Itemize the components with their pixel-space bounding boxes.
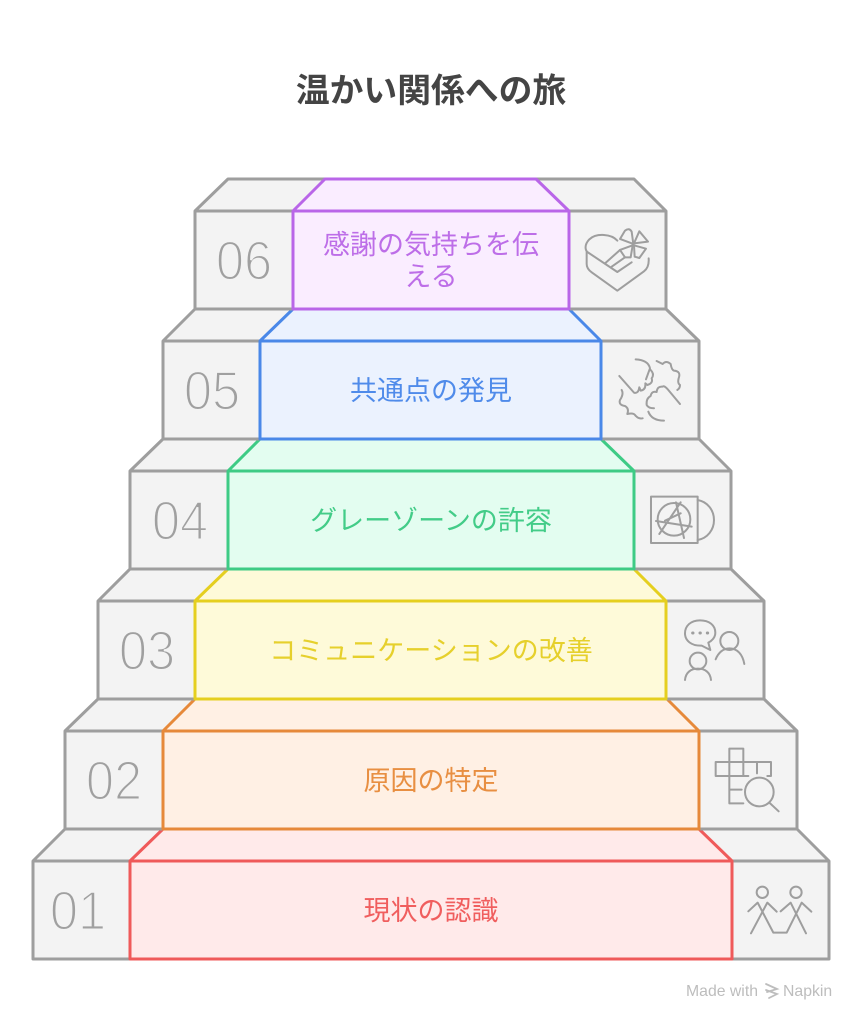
- icon: people talking: [685, 620, 744, 680]
- step 04 grey block: [130, 439, 731, 569]
- footer text right: Napkin: [783, 983, 832, 1000]
- icon: crossword with magnifier: [716, 749, 779, 811]
- step 04: グレーゾーンの許容: [130, 439, 731, 569]
- step 06 label: 感謝の気持ちを伝: [323, 230, 539, 260]
- title: 温かい関係への旅: [296, 72, 566, 110]
- step 06 number: 06: [216, 231, 272, 292]
- step 02 grey block: [65, 699, 797, 829]
- icon: clasped hands: [619, 359, 680, 421]
- step 05 label: 共通点の発見: [350, 376, 512, 406]
- step 01 grey block: [33, 829, 829, 959]
- step 03 coloured panel: [195, 569, 666, 699]
- step 02: 原因の特定: [65, 699, 797, 829]
- step 03: コミュニケーションの改善: [98, 569, 764, 699]
- step 03 grey block: [98, 569, 764, 699]
- step 04 number: 04: [152, 491, 208, 552]
- step 05 grey block: [163, 309, 699, 439]
- step 04 coloured panel: [228, 439, 634, 569]
- footer: Made with Napkin: [686, 983, 832, 1000]
- step 05 coloured panel: [260, 309, 601, 439]
- step 03 number: 03: [119, 621, 175, 682]
- icon: napkin logo: [766, 984, 777, 998]
- step 01 label: 現状の認識: [364, 896, 498, 926]
- step 01 number: 01: [50, 881, 106, 942]
- step 06: 感謝の気持ちを伝える: [195, 179, 666, 309]
- step 02 label: 原因の特定: [364, 766, 498, 796]
- icon: record sleeve with anarchy symbol: [651, 497, 714, 543]
- step 03 label: コミュニケーションの改善: [269, 636, 593, 666]
- step 02 coloured panel: [163, 699, 699, 829]
- step 06 grey block: [195, 179, 666, 309]
- step 05 number: 05: [184, 361, 240, 422]
- icon: two linked figures: [748, 887, 811, 933]
- step 06 coloured panel: [293, 179, 569, 309]
- step 01: 現状の認識: [33, 829, 829, 959]
- icon: heart gift box: [586, 229, 649, 291]
- step 01 coloured panel: [130, 829, 732, 959]
- footer text left: Made with: [686, 983, 758, 1000]
- step 04 label: グレーゾーンの許容: [310, 506, 552, 536]
- step 06 label: える: [404, 262, 458, 292]
- step 05: 共通点の発見: [163, 309, 699, 439]
- step 02 number: 02: [86, 751, 142, 812]
